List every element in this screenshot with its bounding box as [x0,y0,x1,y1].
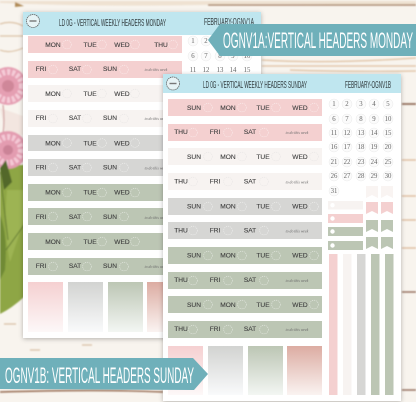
front sheet calendar numbers: 30 [385,173,392,180]
front sheet header rows: TUE [256,302,270,309]
front sheet header rows: SAT [244,129,256,136]
front sheet header rows: WED [292,252,308,260]
panel: back sticker sheet Monday [23,12,261,338]
front sheet calendar numbers: 23 [358,159,365,166]
back sheet header rows: to do this week [145,166,168,170]
front sheet vertical strips [329,254,394,395]
back sheet header rows: SAT [69,115,81,122]
front sheet header rows: SUN [187,252,201,260]
front sheet header rows [168,99,322,338]
back sheet header rows: MON [45,42,61,49]
front sheet header rows: SUN [187,302,201,309]
front sheet header rows: THU [174,129,188,136]
front sheet header rows: SUN [187,154,201,161]
back sheet calendar numbers: 15 [244,67,251,74]
back sheet header rows: FRI [36,66,46,73]
flowers and leaves [0,67,27,314]
back sheet header rows: SUN [103,263,117,270]
back sheet header rows: SUN [103,214,117,221]
back sheet header rows: SAT [69,164,81,172]
back sheet header rows: SAT [69,214,81,221]
back sheet calendar numbers: 1 [191,38,195,45]
front sheet calendar numbers: 28 [358,173,365,180]
front sheet header rows: MON [220,105,236,112]
back sheet calendar numbers: 5 [245,38,249,45]
front sheet header rows: WED [292,204,308,210]
back sheet calendar numbers: 10 [244,53,251,60]
back sheet calendar numbers: 7 [204,53,208,60]
back sheet header rows: FRI [36,263,46,270]
back sheet calendar numbers: 3 [218,38,222,45]
front sheet calendar numbers [329,99,393,196]
front sheet header rows: to do this week [286,131,309,135]
front sheet calendar numbers: 8 [359,116,363,123]
front sheet header rows: SAT [244,277,256,284]
front sheet calendar numbers: 24 [371,159,378,166]
back sheet header rows: WED [114,91,130,98]
front sheet header rows: SAT [244,228,256,234]
front sheet calendar numbers: 7 [345,116,349,123]
back sheet header rows: FRI [36,214,46,221]
front sheet header rows: MON [220,154,236,161]
front sheet calendar numbers: 22 [344,159,351,166]
front sheet calendar numbers: 20 [385,144,392,151]
back sheet header rows: to do this week [145,216,168,220]
front sheet calendar numbers: 6 [332,116,336,123]
back sheet calendar numbers: 14 [230,67,237,74]
front sheet calendar numbers: 18 [358,144,365,151]
front sheet label tabs [328,201,363,250]
front sheet calendar numbers: 27 [344,173,351,180]
front sheet calendar numbers: 17 [344,144,351,151]
panel: front sticker sheet Sunday [163,74,401,401]
back sheet header rows: WED [114,140,130,148]
front sheet calendar numbers: 25 [385,159,392,166]
front sheet calendar numbers: 2 [345,101,349,108]
back sheet header rows: FRI [36,164,46,172]
front sheet header rows: to do this week [286,230,309,234]
back sheet header rows: TUE [83,140,97,148]
front sheet calendar numbers: 12 [344,130,351,137]
front sheet calendar numbers: 3 [359,101,363,108]
front sheet calendar numbers: 13 [358,130,365,137]
back sheet header rows: WED [114,190,130,196]
front sheet flag stickers [366,186,393,249]
back sheet header: FEBRUARY-OGNV1A [204,17,254,28]
front sheet header rows: MON [220,252,236,260]
front sheet calendar numbers: 10 [385,116,392,123]
back sheet header rows: to do this week [145,265,168,269]
front sheet calendar numbers: 11 [331,130,337,137]
front sheet header rows: TUE [256,105,270,112]
front sheet header rows: SUN [187,105,201,112]
back sheet header rows: TUE [83,190,97,196]
front sheet calendar numbers: 4 [372,101,376,108]
back sheet header rows: MON [45,91,61,98]
back sheet header [23,12,261,35]
front sheet header rows: TUE [256,252,270,260]
front sheet calendar numbers: 9 [372,116,376,123]
banner: OGNV1B vertical headers Sunday [0,358,208,390]
back sheet calendar numbers: 13 [217,67,224,74]
back sheet calendar numbers [188,36,252,74]
text: OGNV1B: VERTICAL HEADERS SUNDAY [5,363,194,388]
front sheet header rows: FRI [210,228,220,234]
front sheet header rows: FRI [210,277,220,284]
back sheet header rows: TUE [83,91,97,98]
front sheet calendar numbers: 21 [331,159,337,166]
front sheet calendar numbers: 29 [371,173,378,180]
front sheet calendar numbers: 19 [371,144,378,151]
front sheet header [163,74,401,93]
front sheet header rows: SAT [244,326,256,333]
front sheet header rows: SUN [187,204,201,210]
back sheet calendar numbers: 9 [231,53,235,60]
front sheet calendar numbers: 16 [331,144,338,151]
back sheet header rows: TUE [83,239,97,246]
front sheet header rows: to do this week [286,328,309,332]
back sheet calendar numbers: 11 [190,67,196,74]
back sheet header rows [28,36,182,275]
back sheet header rows: MON [45,190,61,196]
front sheet header rows: TUE [256,154,270,161]
back sheet header rows: MON [45,239,61,246]
front sheet calendar numbers: 31 [331,188,337,195]
front sheet calendar numbers: 5 [386,101,390,108]
front sheet header rows: WED [292,302,308,309]
back sheet header rows: WED [114,239,130,246]
front sheet calendar numbers: 26 [331,173,338,180]
back sheet header rows: MON [45,140,61,148]
back sheet calendar numbers: 6 [191,53,195,60]
back sheet header: LD 0G - VERTICAL WEEKLY HEADERS MONDAY [59,18,166,29]
front sheet header rows: MON [220,302,236,309]
front sheet header rows: THU [174,178,188,186]
front sheet header rows: to do this week [286,279,309,283]
front sheet header rows: MON [220,204,236,210]
back sheet calendar numbers: 4 [231,38,235,45]
back sheet calendar numbers: 2 [204,38,208,45]
front sheet header rows: THU [174,326,188,333]
front sheet header rows: THU [174,277,188,284]
back sheet header rows: THU [154,42,168,49]
front sheet header rows: FRI [210,326,220,333]
back sheet header rows: to do this week [145,117,168,121]
back sheet calendar numbers: 12 [203,67,210,74]
front sheet gradient swatches [168,346,322,395]
front sheet calendar numbers: 14 [371,130,378,137]
front sheet header rows: SAT [244,178,256,186]
front sheet calendar numbers: 15 [385,130,392,137]
back sheet header rows: SUN [103,115,117,122]
back sheet header rows: SAT [69,66,81,73]
front sheet header rows: WED [292,105,308,112]
back sheet header rows: TUE [83,42,97,49]
back sheet header rows: FRI [36,115,46,122]
back sheet header rows: SUN [103,164,117,172]
front sheet header rows: FRI [210,178,220,186]
front sheet header rows: THU [174,228,188,234]
back sheet header rows: WED [114,42,130,49]
back sheet gradient swatches [28,282,182,332]
back sheet header rows: to do this week [145,68,168,72]
back sheet header rows: SAT [69,263,81,270]
front sheet header rows: to do this week [286,180,309,184]
front sheet header rows: TUE [256,204,270,210]
front sheet calendar numbers: 1 [332,101,336,108]
back sheet header rows: SUN [103,66,117,73]
front sheet header rows: FRI [210,129,220,136]
front sheet header rows: WED [292,154,308,161]
back sheet calendar numbers: 8 [218,53,222,60]
